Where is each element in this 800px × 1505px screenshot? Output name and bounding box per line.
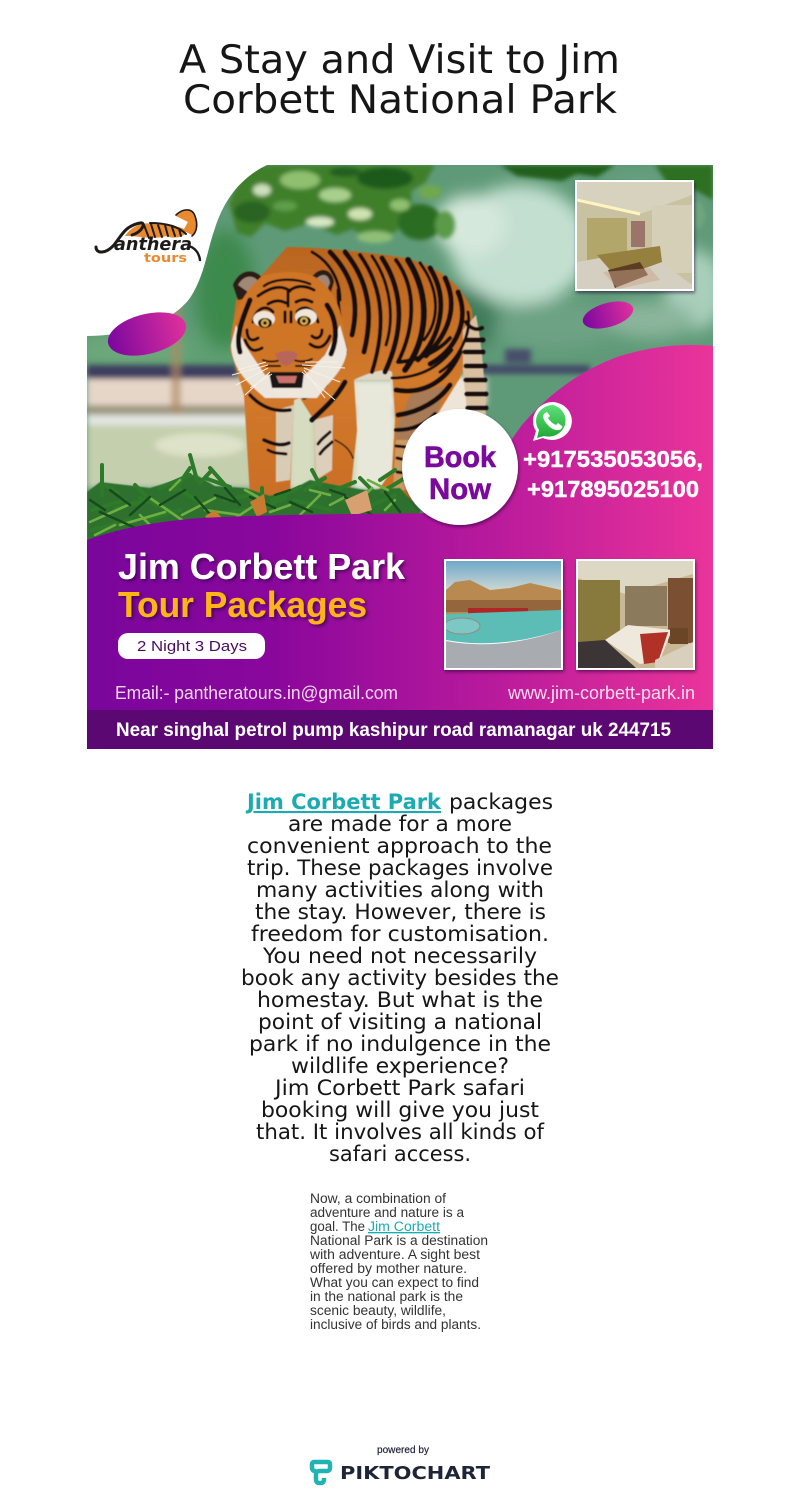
tiger face markings <box>238 280 336 366</box>
title: Corbett National Park <box>183 78 617 123</box>
secondary paragraph: scenic beauty, wildlife, <box>310 1303 446 1318</box>
main paragraph: convenient approach to the <box>247 834 552 858</box>
main paragraph: many activities along with <box>256 878 544 902</box>
call to action circle <box>402 409 518 525</box>
main paragraph: point of visiting a national <box>258 1010 542 1034</box>
logo: Panthera tours <box>96 210 200 265</box>
purple ellipse left <box>108 312 186 356</box>
call to action circle: Now <box>429 473 492 506</box>
main paragraph: that. It involves all kinds of <box>256 1120 545 1144</box>
tiger <box>230 247 486 510</box>
tiger whiskers <box>232 362 345 400</box>
secondary paragraph: National Park is a destination <box>310 1233 488 1248</box>
main paragraph <box>241 790 559 1166</box>
tiger white eye patches <box>253 311 275 327</box>
banner: tour package advertisement <box>70 165 725 749</box>
footer: powered by Piktochart <box>312 1444 491 1484</box>
main paragraph: Jim Corbett Park safari <box>273 1076 525 1100</box>
website: www.jim-corbett-park.in <box>507 683 695 703</box>
tiger tail <box>463 315 486 422</box>
address bar: Near singhal petrol pump kashipur road ramanagar uk 244715 <box>116 720 671 741</box>
hotel photo: resort pool <box>444 559 563 670</box>
title <box>179 38 620 123</box>
secondary paragraph: adventure and nature is a <box>310 1205 464 1220</box>
tiger stripes <box>250 252 486 474</box>
tiger ears <box>233 272 264 300</box>
tiger pale belly, inner legs and rump <box>354 370 395 420</box>
secondary paragraph: offered by mother nature. <box>310 1261 467 1276</box>
phone numbers: +917535053056, <box>523 446 703 472</box>
tree foliage <box>229 165 713 243</box>
pink and purple wave panel <box>87 345 713 749</box>
banner heading: Tour Packages <box>118 584 367 625</box>
secondary paragraph <box>309 1191 488 1332</box>
main paragraph: booking will give you just <box>261 1098 539 1122</box>
secondary paragraph: What you can expect to find <box>310 1275 479 1290</box>
title: A Stay and Visit to Jim <box>179 38 620 83</box>
icon: whatsapp <box>533 402 572 441</box>
main paragraph: wildlife experience? <box>291 1054 509 1078</box>
secondary paragraph: Now, a combination of <box>310 1191 446 1206</box>
banner heading: Jim Corbett Park <box>118 546 406 587</box>
logo tiger mark <box>125 210 197 238</box>
hotel photo: bedroom <box>576 559 695 670</box>
purple ellipse right <box>582 301 634 329</box>
icon: Piktochart logo <box>312 1462 330 1483</box>
logo wordmark: anthera <box>114 234 192 255</box>
logo: Panthera tours: tours <box>144 251 187 265</box>
tiger eyes <box>258 318 272 328</box>
tiger white ruff <box>231 325 347 398</box>
secondary paragraph: goal. The <box>310 1219 365 1234</box>
tiger body <box>230 247 472 510</box>
duration pill: 2 Night 3 Days <box>137 638 247 655</box>
main paragraph: You need not necessarily <box>262 944 537 968</box>
photo background: blurred forest and fence <box>87 165 713 540</box>
banner heading <box>118 546 406 625</box>
white logo blob <box>87 165 267 336</box>
main paragraph: freedom for customisation. <box>251 922 549 946</box>
contact email: Email:- pantheratours.in@gmail.com <box>115 683 398 703</box>
main paragraph: safari access. <box>329 1142 471 1166</box>
main paragraph: book any activity besides the <box>241 966 559 990</box>
call to action circle: Book <box>424 441 496 474</box>
footer: powered by Piktochart: PIKTOCHART <box>340 1463 491 1484</box>
phone numbers <box>524 450 702 498</box>
main paragraph: Jim Corbett Park <box>245 790 442 814</box>
main paragraph: homestay. But what is the <box>257 988 543 1012</box>
main paragraph: the stay. However, there is <box>255 900 546 924</box>
phone numbers: +917895025100 <box>527 476 699 502</box>
tiger nose and mouth <box>275 351 298 366</box>
secondary paragraph: in the national park is the <box>310 1289 463 1304</box>
tiger head <box>230 272 348 362</box>
foreground grass <box>87 455 420 545</box>
main paragraph: park if no indulgence in the <box>249 1032 551 1056</box>
secondary paragraph: Jim Corbett <box>368 1219 440 1234</box>
footer: powered by Piktochart: powered by <box>377 1444 430 1456</box>
hotel photo: living room <box>575 180 694 291</box>
duration pill <box>118 633 265 659</box>
secondary paragraph: with adventure. A sight best <box>309 1247 480 1262</box>
main paragraph: trip. These packages involve <box>247 856 553 880</box>
address bar <box>87 710 713 749</box>
main paragraph: packages <box>449 790 553 814</box>
main paragraph: are made for a more <box>288 812 512 836</box>
secondary paragraph: inclusive of birds and plants. <box>310 1317 481 1332</box>
